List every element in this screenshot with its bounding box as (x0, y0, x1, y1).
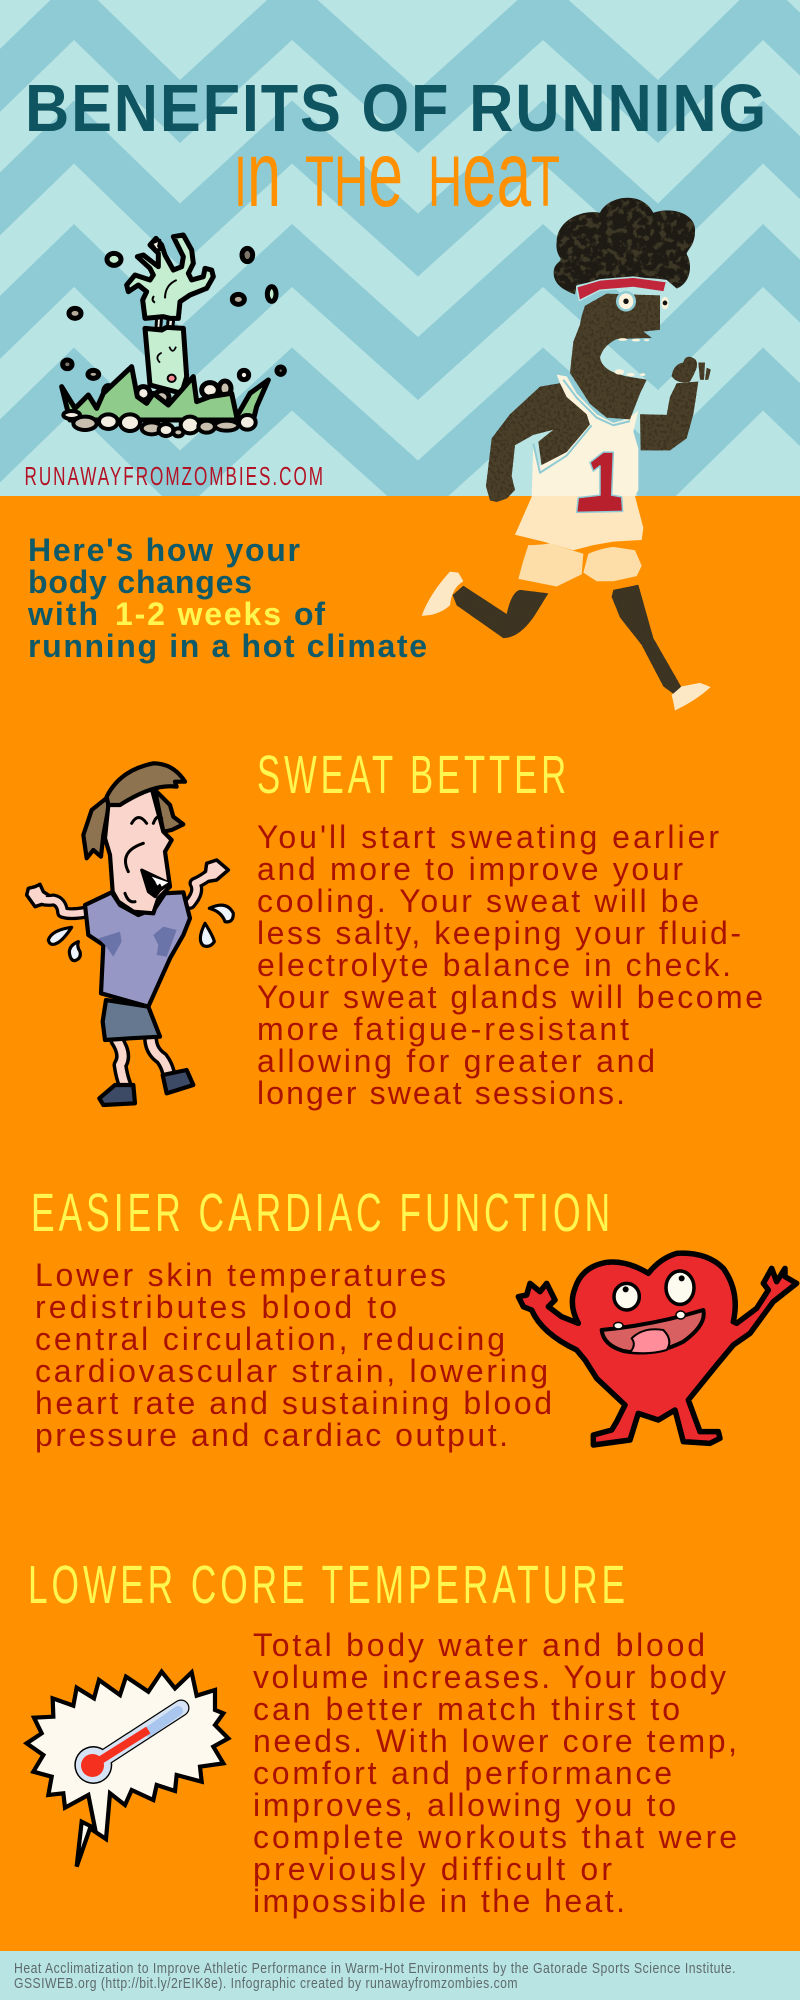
panel: sweat better (27, 745, 763, 1111)
body text: sweat better: allowing for greater and (257, 1043, 655, 1079)
icon: smiling heart (518, 1253, 797, 1445)
body text: lower core temperature: Total body water and blood (253, 1627, 705, 1663)
body text: easier cardiac function: central circulation, reducing (35, 1321, 505, 1357)
runner hair (554, 198, 695, 294)
body text: sweat better: and more to improve your (257, 851, 683, 887)
body text: easier cardiac function: heart rate and sustaining blood (35, 1385, 552, 1421)
icon: thermometer in speech burst (27, 1672, 228, 1867)
intro text: of (294, 596, 325, 632)
runner singlet trim (533, 380, 639, 473)
subtitle: in the heat: In (234, 122, 281, 226)
body text: sweat better: less salty, keeping your fluid- (257, 915, 741, 951)
runner headband (577, 277, 667, 301)
body text: sweat better: Your sweat glands will become (257, 979, 763, 1015)
body text: sweat better: more fatigue-resistant (257, 1011, 629, 1047)
body text: lower core temperature: can better match thirst to (253, 1691, 680, 1727)
body text: lower core temperature: comfort and performance (253, 1755, 672, 1791)
body text: sweat better: You'll start sweating earlier (257, 819, 719, 855)
runner arms (486, 357, 711, 502)
icon: running man (422, 198, 711, 710)
runner shorts (518, 543, 642, 586)
body text: lower core temperature: volume increases. Your body (253, 1659, 726, 1695)
panel: easier cardiac function (31, 1183, 797, 1453)
runner bib number 1 (577, 452, 623, 512)
body text: easier cardiac function (35, 1257, 552, 1453)
body text: easier cardiac function: cardiovascular strain, lowering (35, 1353, 548, 1389)
subtitle: in the heat: HeaT (428, 122, 560, 226)
intro text: Here's how your (28, 532, 300, 568)
body text: lower core temperature: impossible in the heat. (253, 1883, 625, 1919)
body text: lower core temperature: needs. With lower core temp, (253, 1723, 737, 1759)
intro text: 1-2 weeks (115, 596, 281, 632)
runner eyes (616, 291, 669, 312)
body text: easier cardiac function: redistributes blood to (35, 1289, 397, 1325)
body text: easier cardiac function: pressure and cardiac output. (35, 1417, 508, 1453)
body text: sweat better (257, 819, 763, 1111)
body text: sweat better: electrolyte balance in check. (257, 947, 731, 983)
icon: sweating man (27, 763, 233, 1105)
intro text: with (27, 596, 98, 632)
runner singlet (515, 375, 643, 550)
intro text: body changes (28, 564, 252, 600)
runner legs and feet (422, 572, 711, 710)
body text: lower core temperature (253, 1627, 737, 1919)
heading: sweat better: SWEAT BETTER (257, 745, 570, 805)
icon: zombie hand rising from grass (62, 235, 284, 436)
subtitle: in the heat: THe (305, 122, 403, 226)
runner teeth (615, 338, 649, 376)
footer source note: GSSIWEB.org (http://bit.ly/2rEIK8e). Infographic created by runawayfromzombies.com (14, 1975, 518, 1992)
body text: sweat better: cooling. Your sweat will be (257, 883, 699, 919)
intro text: running in a hot climate (28, 628, 427, 664)
body text: sweat better: longer sweat sessions. (257, 1075, 625, 1111)
footer source note (0, 1951, 800, 2000)
body text: lower core temperature: previously difficult or (253, 1851, 612, 1887)
body text: lower core temperature: improves, allowing you to (253, 1787, 676, 1823)
panel: lower core temperature (27, 1555, 737, 1919)
website label: RUNAWAYFROMZOMBIES.COM (24, 461, 325, 491)
intro text (27, 532, 427, 664)
subtitle: in the heat (234, 122, 560, 226)
body text: lower core temperature: complete workouts that were (253, 1819, 737, 1855)
body text: easier cardiac function: Lower skin temperatures (35, 1257, 446, 1293)
chevron header panel (0, 0, 800, 524)
runner head and neck (570, 294, 660, 419)
